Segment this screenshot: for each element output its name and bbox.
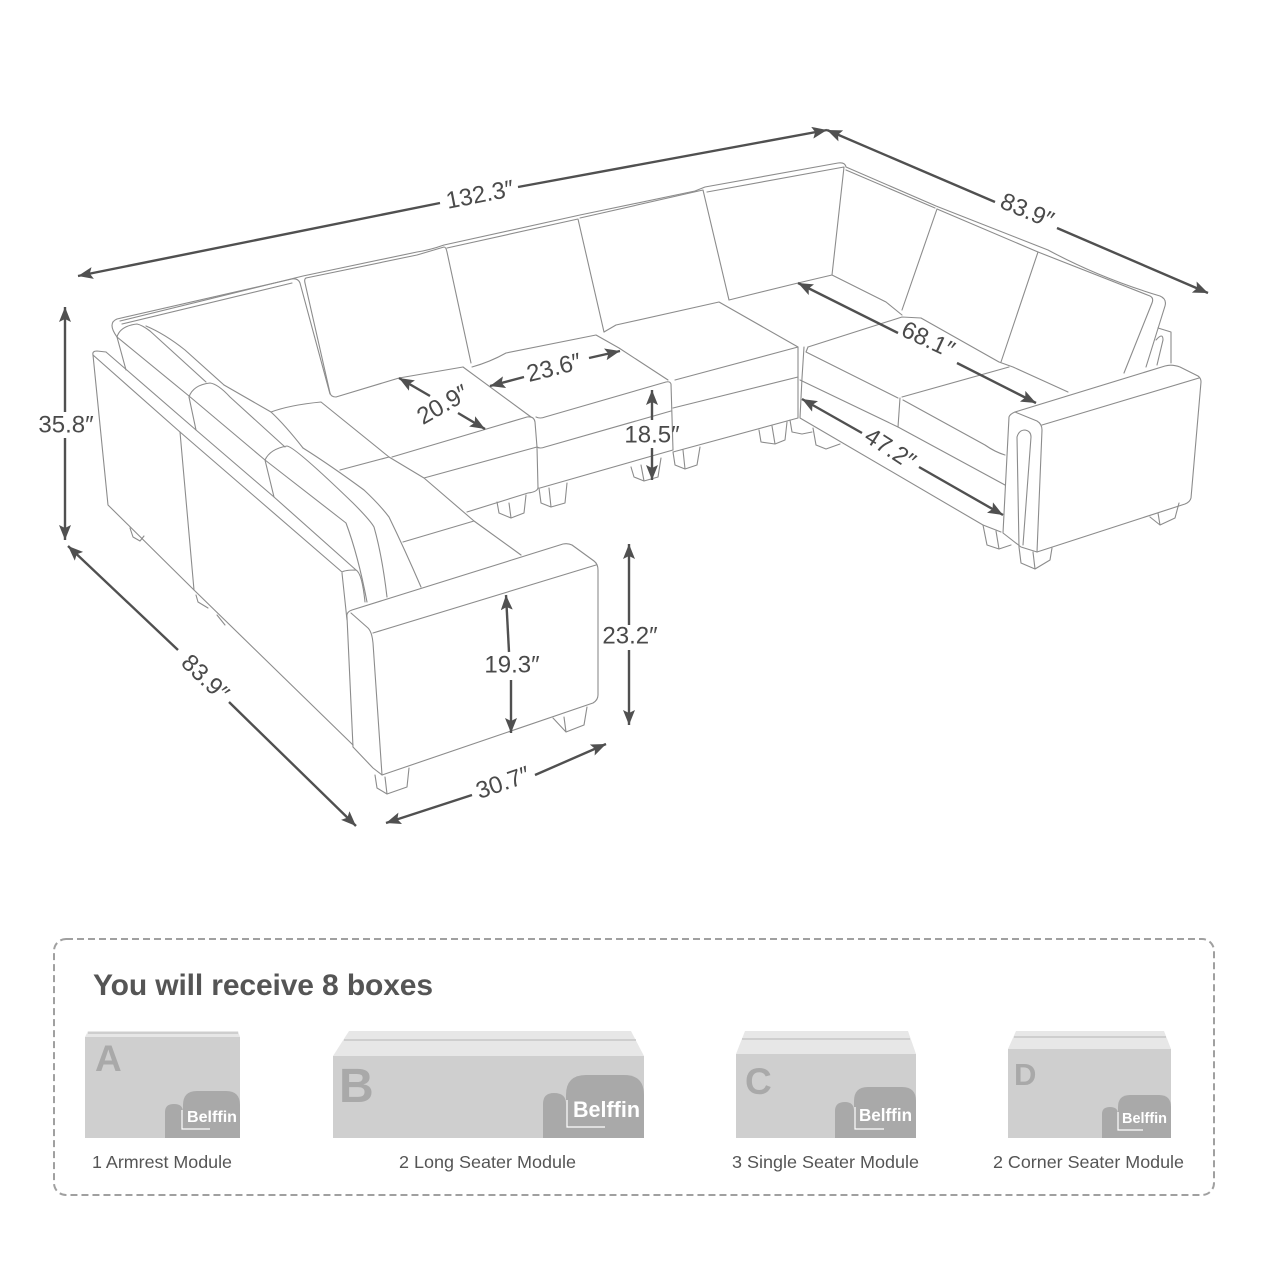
label: armrest module: 1 Armrest Module [92, 1152, 232, 1172]
dimension: inner length 68.1: 68.1″ [897, 316, 959, 364]
seat cushions [271, 275, 1068, 555]
dimension: seat depth 20.9: 20.9″ [412, 379, 474, 430]
box B [333, 1031, 644, 1138]
dimension: seat width 23.6 [490, 348, 620, 388]
left side panels [93, 351, 365, 745]
box B: B [339, 1060, 374, 1113]
dimension: arm height 23.2: 23.2″ [602, 622, 658, 650]
front-left armrest [347, 544, 598, 775]
sofa line drawing [93, 163, 1201, 794]
dimension: right depth 83.9 [827, 130, 1208, 293]
right armrest [1003, 365, 1201, 552]
heading: You will receive 8 boxes [93, 969, 433, 1002]
panel: package contents [54, 939, 1214, 1195]
box D: D [1014, 1057, 1036, 1092]
box D [1008, 1031, 1171, 1138]
label: corner seater module: 2 Corner Seater Module [993, 1152, 1184, 1172]
dimension: overall width 132.3: 132.3″ [444, 175, 517, 215]
dimension: right depth 83.9: 83.9″ [996, 188, 1058, 234]
dimension: height 35.8: 35.8″ [38, 412, 94, 438]
box B: Belffin [573, 1097, 640, 1122]
box A: A [95, 1038, 122, 1079]
dimension: seat depth 20.9 [399, 378, 485, 430]
dimension: arm panel 19.3 [484, 595, 540, 733]
dimension: seat run 47.2 [802, 399, 1003, 515]
left side cushions [117, 324, 421, 602]
back top outline [112, 163, 1165, 394]
dimension: inner length 68.1 [798, 283, 1036, 403]
box A [85, 1031, 240, 1138]
box C: C [745, 1061, 772, 1102]
dimension: seat height 18.5 [624, 390, 680, 480]
dimension: arm panel 19.3: 19.3″ [484, 652, 540, 678]
dimension: seat run 47.2: 47.2″ [859, 423, 921, 476]
sofa legs [375, 420, 1179, 794]
dimension: seat width 23.6: 23.6″ [524, 348, 585, 388]
label: single seater module: 3 Single Seater Module [732, 1152, 919, 1172]
back cushions [305, 167, 1171, 397]
box A: Belffin [187, 1109, 237, 1126]
box C: Belffin [859, 1105, 912, 1125]
dimension: arm length 30.7: 30.7″ [472, 761, 534, 805]
dimension: overall width 132.3 [78, 130, 827, 276]
box D: Belffin [1122, 1111, 1167, 1127]
dimension: arm length 30.7 [386, 744, 606, 823]
label: long seater module: 2 Long Seater Module [399, 1152, 576, 1172]
dimension: seat height 18.5: 18.5″ [624, 422, 680, 448]
dimension: left depth 83.9: 83.9″ [176, 649, 235, 707]
dimension: left depth 83.9 [68, 546, 356, 826]
box C [736, 1031, 916, 1138]
